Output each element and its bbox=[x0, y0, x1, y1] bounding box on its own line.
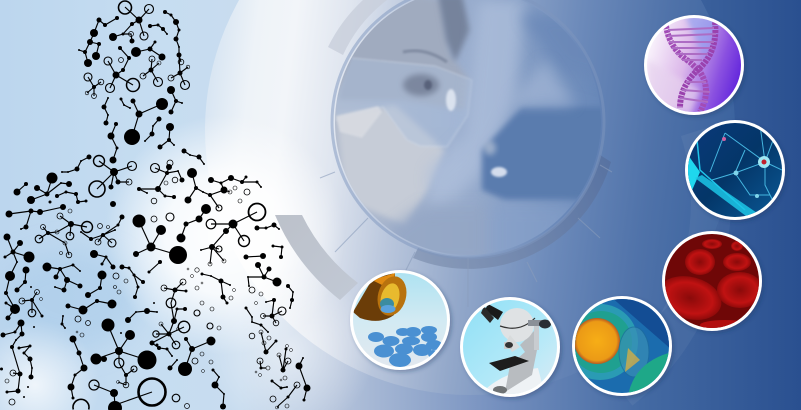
molecular bonds bbox=[3, 7, 307, 406]
dark figure bbox=[520, 12, 569, 64]
photo circle: neuron bbox=[685, 120, 785, 220]
human figure built from molecules bbox=[0, 1, 310, 410]
lab coat lower bbox=[390, 203, 469, 254]
skin and mask bbox=[337, 105, 445, 225]
photo circle: microscope bbox=[460, 297, 560, 397]
photo circle: pills and bottle bbox=[350, 270, 450, 370]
filled atoms bbox=[0, 10, 310, 410]
mask strap bbox=[336, 106, 382, 138]
photo circle: red blood cells bbox=[654, 231, 763, 331]
eye bbox=[403, 74, 439, 96]
outer faint swoosh on the right bbox=[620, 130, 711, 390]
portrait: scientist in goggles bbox=[330, 0, 610, 265]
large pale disc behind the portrait bbox=[205, 0, 735, 395]
background light bbox=[428, 0, 525, 215]
grey sweep arc lower left bbox=[275, 215, 358, 300]
ring segments bbox=[320, 0, 612, 307]
goggles bbox=[336, 58, 472, 147]
photo circle: cell bbox=[562, 296, 672, 396]
photo circle: DNA helix bbox=[644, 15, 745, 115]
hollow atoms bbox=[5, 1, 300, 410]
hair bbox=[438, 0, 470, 62]
